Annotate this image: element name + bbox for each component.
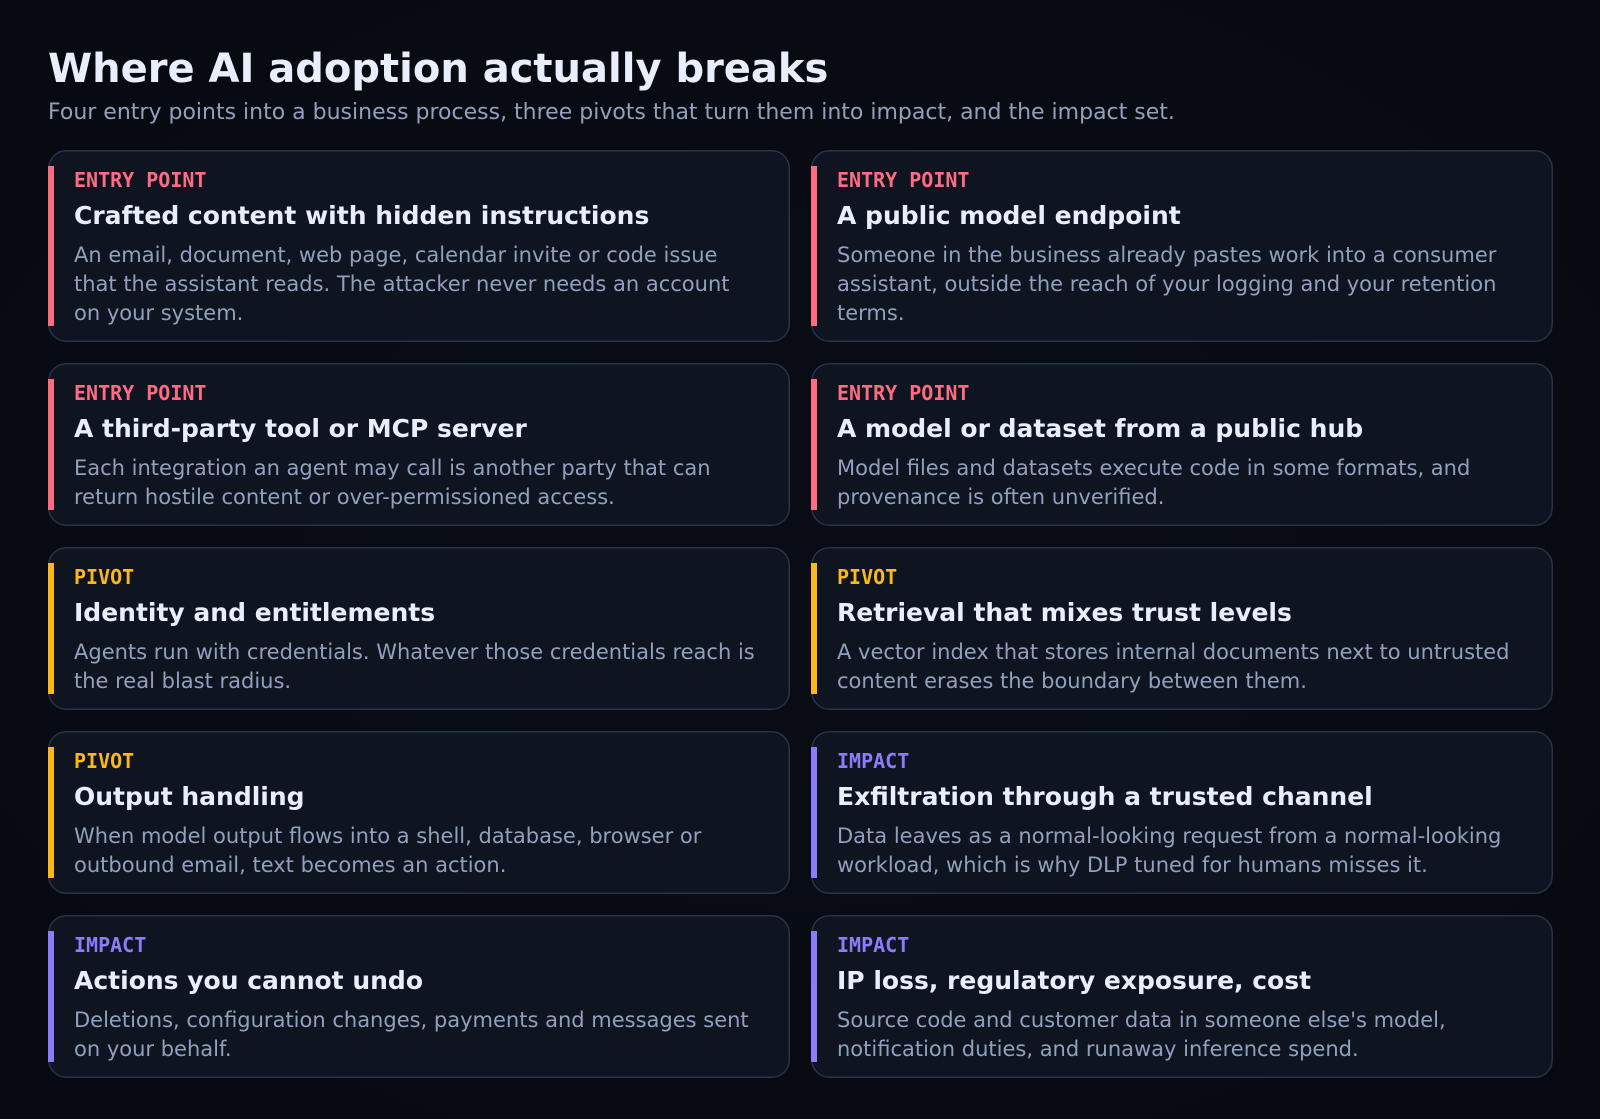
- panel: retrieval: Retrieval that mixes trust levels: [837, 598, 1292, 627]
- panel: actions: on your behalf.: [74, 1037, 232, 1061]
- panel: identity: Agents run with credentials. Whatever those credentials reach is: [74, 640, 755, 664]
- panel: third-party tool: A third-party tool or MCP server: [74, 414, 527, 443]
- panel: identity: PIVOT: [74, 565, 134, 589]
- panel: retrieval: PIVOT: [837, 565, 897, 589]
- panel: identity: the real blast radius.: [74, 669, 291, 693]
- panel: output handling: When model output flows into a shell, database, browser or: [74, 824, 702, 848]
- panel: public hub: A model or dataset from a public hub: [837, 414, 1363, 443]
- panel: public hub: ENTRY POINT: [837, 381, 969, 405]
- panel: third-party tool: ENTRY POINT: [74, 381, 206, 405]
- panel: IP loss: IP loss, regulatory exposure, cost: [837, 966, 1311, 995]
- panel: public model endpoint: Someone in the business already pastes work into a consumer: [837, 243, 1497, 267]
- panel: actions: IMPACT: [74, 933, 146, 957]
- panel: actions: Actions you cannot undo: [74, 966, 423, 995]
- panel: output handling: Output handling: [74, 782, 305, 811]
- panel: crafted content: An email, document, web page, calendar invite or code issue: [74, 243, 717, 267]
- panel: crafted content: on your system.: [74, 301, 243, 325]
- panel: IP loss: notification duties, and runaway inference spend.: [837, 1037, 1359, 1061]
- panel: public model endpoint: assistant, outside the reach of your logging and your retention: [837, 272, 1496, 296]
- panel: exfiltration: Data leaves as a normal-looking request from a normal-looking: [837, 824, 1501, 848]
- panel: actions: [48, 916, 789, 1077]
- panel: identity: [48, 548, 789, 709]
- panel: identity: Identity and entitlements: [74, 598, 435, 627]
- panel: retrieval: content erases the boundary between them.: [837, 669, 1307, 693]
- subtitle: Four entry points into a business process, three pivots that turn them into impact, and the impact set.: [48, 100, 1175, 125]
- panel: exfiltration: IMPACT: [837, 749, 909, 773]
- panel: public model endpoint: [811, 151, 1552, 341]
- panel: third-party tool: [48, 364, 789, 525]
- panel: retrieval: A vector index that stores internal documents next to untrusted: [837, 640, 1510, 664]
- panel: IP loss: IMPACT: [837, 933, 909, 957]
- panel: actions: Deletions, configuration changes, payments and messages sent: [74, 1008, 749, 1032]
- panel: exfiltration: workload, which is why DLP tuned for humans misses it.: [837, 853, 1428, 877]
- panel: IP loss: Source code and customer data in someone else's model,: [837, 1008, 1446, 1032]
- panel: output handling: PIVOT: [74, 749, 134, 773]
- panel: public model endpoint: ENTRY POINT: [837, 168, 969, 192]
- panel: public hub: [811, 364, 1552, 525]
- panel: IP loss: [811, 916, 1552, 1077]
- panel: third-party tool: Each integration an agent may call is another party that can: [74, 456, 711, 480]
- panel: output handling: [48, 732, 789, 893]
- panel: public hub: Model files and datasets execute code in some formats, and: [837, 456, 1470, 480]
- panel: exfiltration: [811, 732, 1552, 893]
- panel: retrieval: [811, 548, 1552, 709]
- panel: exfiltration: Exfiltration through a trusted channel: [837, 782, 1373, 811]
- panel: crafted content: [48, 151, 789, 341]
- panel: third-party tool: return hostile content or over-permissioned access.: [74, 485, 615, 509]
- panel: crafted content: that the assistant reads. The attacker never needs an account: [74, 272, 730, 296]
- panel: public model endpoint: A public model endpoint: [837, 201, 1181, 230]
- panel: output handling: outbound email, text becomes an action.: [74, 853, 506, 877]
- title: Where AI adoption actually breaks: [48, 46, 828, 92]
- panel: public model endpoint: terms.: [837, 301, 904, 325]
- panel: public hub: provenance is often unverified.: [837, 485, 1164, 509]
- panel: crafted content: ENTRY POINT: [74, 168, 206, 192]
- panel: crafted content: Crafted content with hidden instructions: [74, 201, 649, 230]
